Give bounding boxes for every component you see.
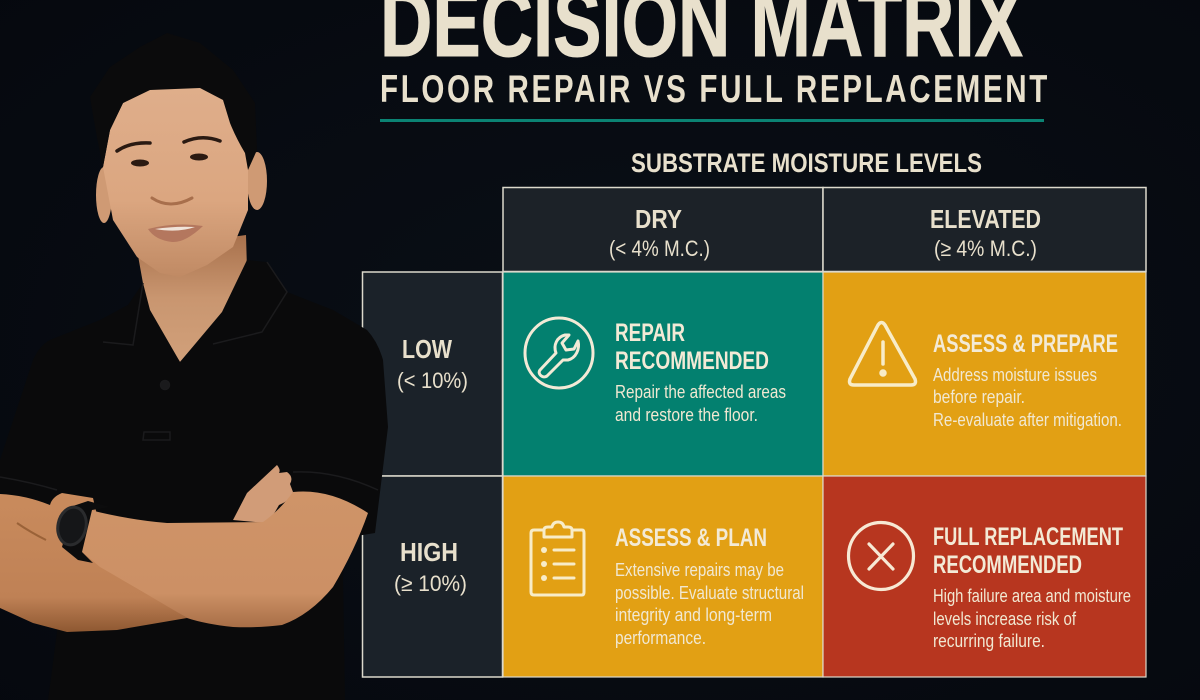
row header: low: (< 10%) xyxy=(397,368,468,393)
neck xyxy=(137,235,247,362)
cell: repair recommended xyxy=(503,272,823,476)
cell: full replacement recommended: levels increase risk of xyxy=(933,609,1077,629)
cell: full replacement recommended xyxy=(823,476,1146,677)
eyes xyxy=(131,154,208,166)
ears xyxy=(96,152,267,223)
decision matrix xyxy=(362,188,1146,677)
cell: assess and plan: performance. xyxy=(615,628,706,648)
column header: dry: DRY xyxy=(635,204,682,234)
icon: warning triangle xyxy=(850,322,916,385)
row header: high: HIGH xyxy=(400,537,458,567)
arm fold crease xyxy=(17,523,46,540)
column header: elevated xyxy=(823,188,1146,272)
cell: repair recommended: REPAIR xyxy=(615,319,685,347)
cell: assess and plan: integrity and long-term xyxy=(615,605,772,625)
cell: assess and plan: possible. Evaluate structural xyxy=(615,583,804,603)
mouth xyxy=(148,225,203,242)
front arm xyxy=(80,491,368,627)
title underline xyxy=(380,119,1044,122)
shirt xyxy=(0,260,388,700)
icon: wrench in circle xyxy=(525,318,593,388)
cell: repair recommended: RECOMMENDED xyxy=(615,347,769,375)
cell: assess and prepare: Address moisture issues xyxy=(933,365,1097,385)
fingers xyxy=(233,465,293,523)
nose xyxy=(152,198,192,204)
row header: low: LOW xyxy=(402,334,452,364)
cell: assess and prepare xyxy=(823,272,1146,476)
cell: assess and prepare: before repair. xyxy=(933,387,1025,407)
portrait: man with crossed arms xyxy=(0,33,388,700)
cell: full replacement recommended: recurring failure. xyxy=(933,631,1045,651)
matrix axis heading: SUBSTRATE MOISTURE LEVELS xyxy=(631,148,982,178)
cell: full replacement recommended: RECOMMENDED xyxy=(933,551,1082,579)
cell: assess and plan: ASSESS & PLAN xyxy=(615,524,767,552)
cell: full replacement recommended: FULL REPLACEMENT xyxy=(933,523,1123,551)
face xyxy=(103,86,248,277)
column header: dry xyxy=(503,188,823,272)
back arm and hand xyxy=(0,493,187,632)
cell: assess and plan: Extensive repairs may be xyxy=(615,560,784,580)
watch xyxy=(54,501,110,563)
icon: x in circle xyxy=(848,522,914,590)
cell: assess and prepare: ASSESS & PREPARE xyxy=(933,330,1118,358)
hair xyxy=(90,33,257,170)
row header: high xyxy=(362,476,502,677)
row header: low xyxy=(362,272,502,476)
column header: elevated: (≥ 4% M.C.) xyxy=(934,236,1037,261)
cell: assess and plan xyxy=(503,476,823,677)
row header: high: (≥ 10%) xyxy=(394,571,467,596)
cell: full replacement recommended: High failure area and moisture xyxy=(933,586,1131,606)
cell: assess and prepare: Re-evaluate after mitigation. xyxy=(933,410,1122,430)
column header: dry: (< 4% M.C.) xyxy=(609,236,710,261)
cell: repair recommended: and restore the floor. xyxy=(615,405,758,425)
shirt details xyxy=(0,262,378,490)
column header: elevated: ELEVATED xyxy=(930,204,1041,234)
eyebrows xyxy=(117,138,220,151)
cell: repair recommended: Repair the affected areas xyxy=(615,382,786,402)
icon: clipboard checklist xyxy=(531,522,584,595)
